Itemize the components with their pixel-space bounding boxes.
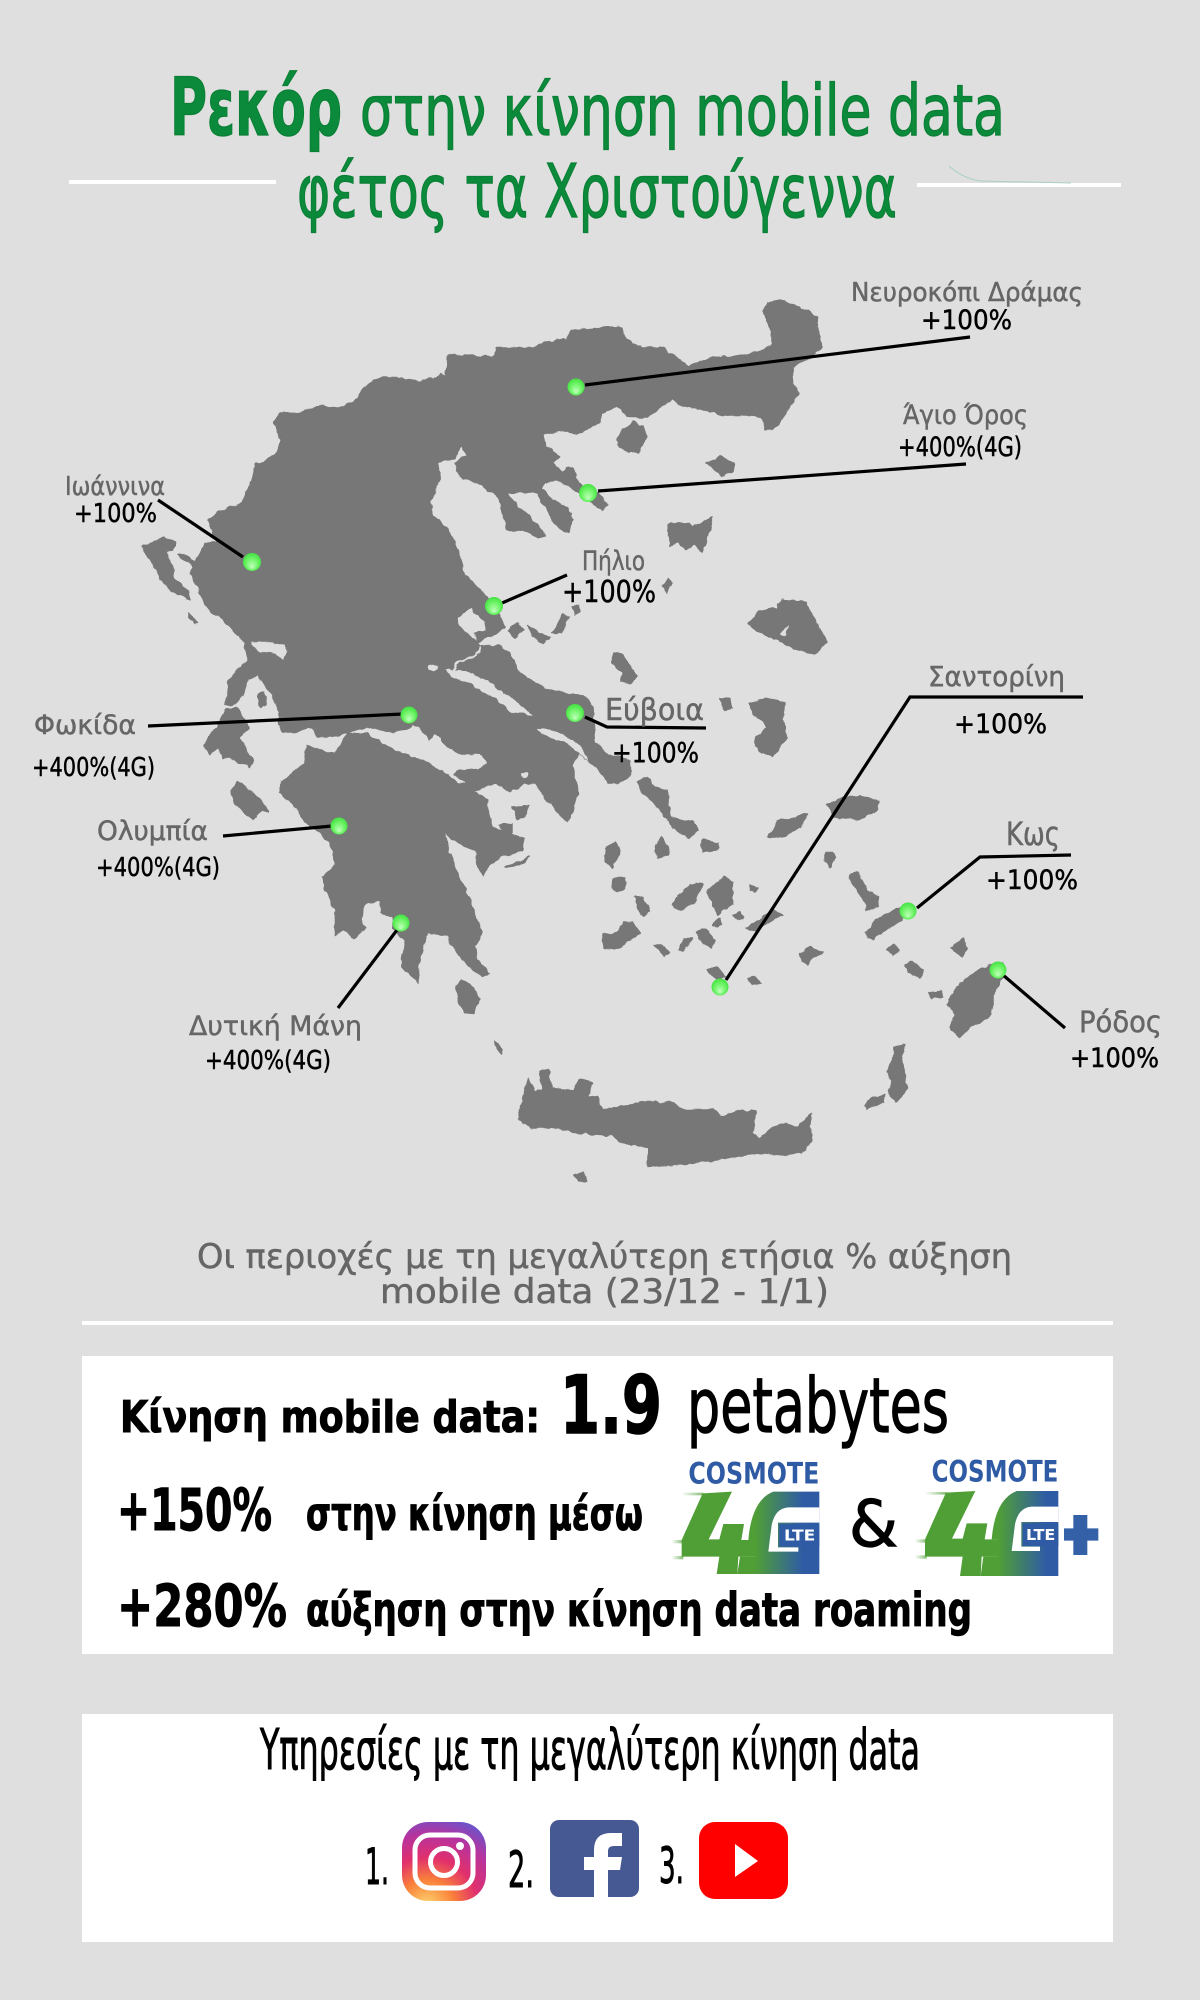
logo: Cosmote 4G+: COSMOTE [932, 1455, 1058, 1489]
panel: top services [82, 1714, 1113, 1942]
callout: Νευροκόπι Δράμας: +100% [921, 305, 1012, 336]
4G growth: +150% [117, 1476, 272, 1544]
mainland, Peloponnese and Euboea [190, 300, 822, 982]
logo: Cosmote 4G+ [915, 1455, 1098, 1576]
callout: Εύβοια: Εύβοια [605, 693, 704, 728]
callout: Ολυμπία [96, 816, 348, 883]
logo: Cosmote 4G: LTE [784, 1527, 815, 1545]
total traffic [120, 1359, 949, 1452]
callout: Πήλιο: Πήλιο [582, 546, 645, 577]
callout: Κως: +100% [986, 865, 1078, 896]
callout: Άγιο Όρος: +400%(4G) [898, 432, 1022, 463]
rank 3: 3. [659, 1837, 684, 1895]
callout: Φωκίδα [32, 706, 418, 783]
callout: Ρόδος: Ρόδος [1079, 1005, 1162, 1039]
callout: Δυτική Μάνη: +400%(4G) [205, 1046, 331, 1076]
title [170, 61, 1005, 235]
callout: Ολυμπία: +400%(4G) [96, 853, 220, 883]
callout: Ολυμπία: Ολυμπία [97, 816, 208, 847]
gulfs [252, 642, 588, 783]
callout: Δυτική Μάνη: Δυτική Μάνη [189, 1011, 362, 1042]
logo: Cosmote 4G: COSMOTE [688, 1456, 819, 1490]
logo: Cosmote 4G+: LTE [1026, 1526, 1055, 1544]
title: φέτος τα Χριστούγεννα [297, 149, 897, 235]
logo: Cosmote 4G [672, 1456, 819, 1574]
callout: Φωκίδα: Φωκίδα [34, 710, 136, 741]
callout: Πήλιο: +100% [562, 575, 656, 610]
callout: Κως: Κως [1006, 815, 1060, 853]
callout: Ιωάννινα: +100% [74, 499, 157, 529]
callout: Ρόδος: +100% [1070, 1043, 1159, 1074]
callout: Σαντορίνη [712, 660, 1083, 996]
roaming growth: αύξηση στην κίνηση data roaming [306, 1583, 972, 1637]
map of Greece [142, 300, 1003, 1182]
Crete [519, 1070, 812, 1167]
callout: Ιωάννινα [65, 472, 261, 571]
map caption [197, 1237, 1012, 1312]
roaming growth: +280% [117, 1572, 287, 1640]
callout: Ρόδος [990, 962, 1162, 1074]
icon: Instagram [402, 1822, 486, 1901]
total traffic: petabytes [687, 1361, 949, 1450]
4G growth [117, 1476, 643, 1544]
4G growth: στην κίνηση μέσω [306, 1487, 643, 1541]
rank 1: 1. [365, 1838, 389, 1896]
callout: Σαντορίνη: Σαντορίνη [928, 660, 1065, 693]
callout: Άγιο Όρος: Άγιο Όρος [903, 400, 1028, 431]
callout: Νευροκόπι Δράμας: Νευροκόπι Δράμας [851, 278, 1083, 308]
title: Ρεκόρ [170, 61, 342, 154]
ampersand: & [849, 1488, 898, 1562]
callout: Φωκίδα: +400%(4G) [32, 753, 155, 783]
rank 2: 2. [508, 1841, 534, 1899]
callout: Σαντορίνη: +100% [954, 709, 1047, 740]
islands [142, 422, 1003, 1182]
callout: Άγιο Όρος [579, 400, 1028, 502]
callout: Κως [900, 815, 1078, 920]
callout: Εύβοια: +100% [612, 736, 699, 769]
callout: Πήλιο [485, 546, 656, 615]
map caption: Οι περιοχές με τη μεγαλύτερη ετήσια % αύξηση [197, 1237, 1012, 1277]
total traffic: 1.9 [560, 1359, 662, 1452]
roaming growth [117, 1572, 972, 1640]
total traffic: Κίνηση mobile data: [120, 1392, 540, 1443]
callout: Δυτική Μάνη [189, 914, 410, 1076]
map caption: mobile data (23/12 - 1/1) [380, 1272, 829, 1312]
callout: Ιωάννινα: Ιωάννινα [65, 472, 165, 502]
callout: Νευροκόπι Δράμας [568, 278, 1083, 396]
panel: mobile data stats [82, 1356, 1113, 1654]
icon: YouTube [699, 1822, 788, 1899]
icon: Facebook [550, 1820, 639, 1897]
callout: Εύβοια [566, 693, 706, 769]
